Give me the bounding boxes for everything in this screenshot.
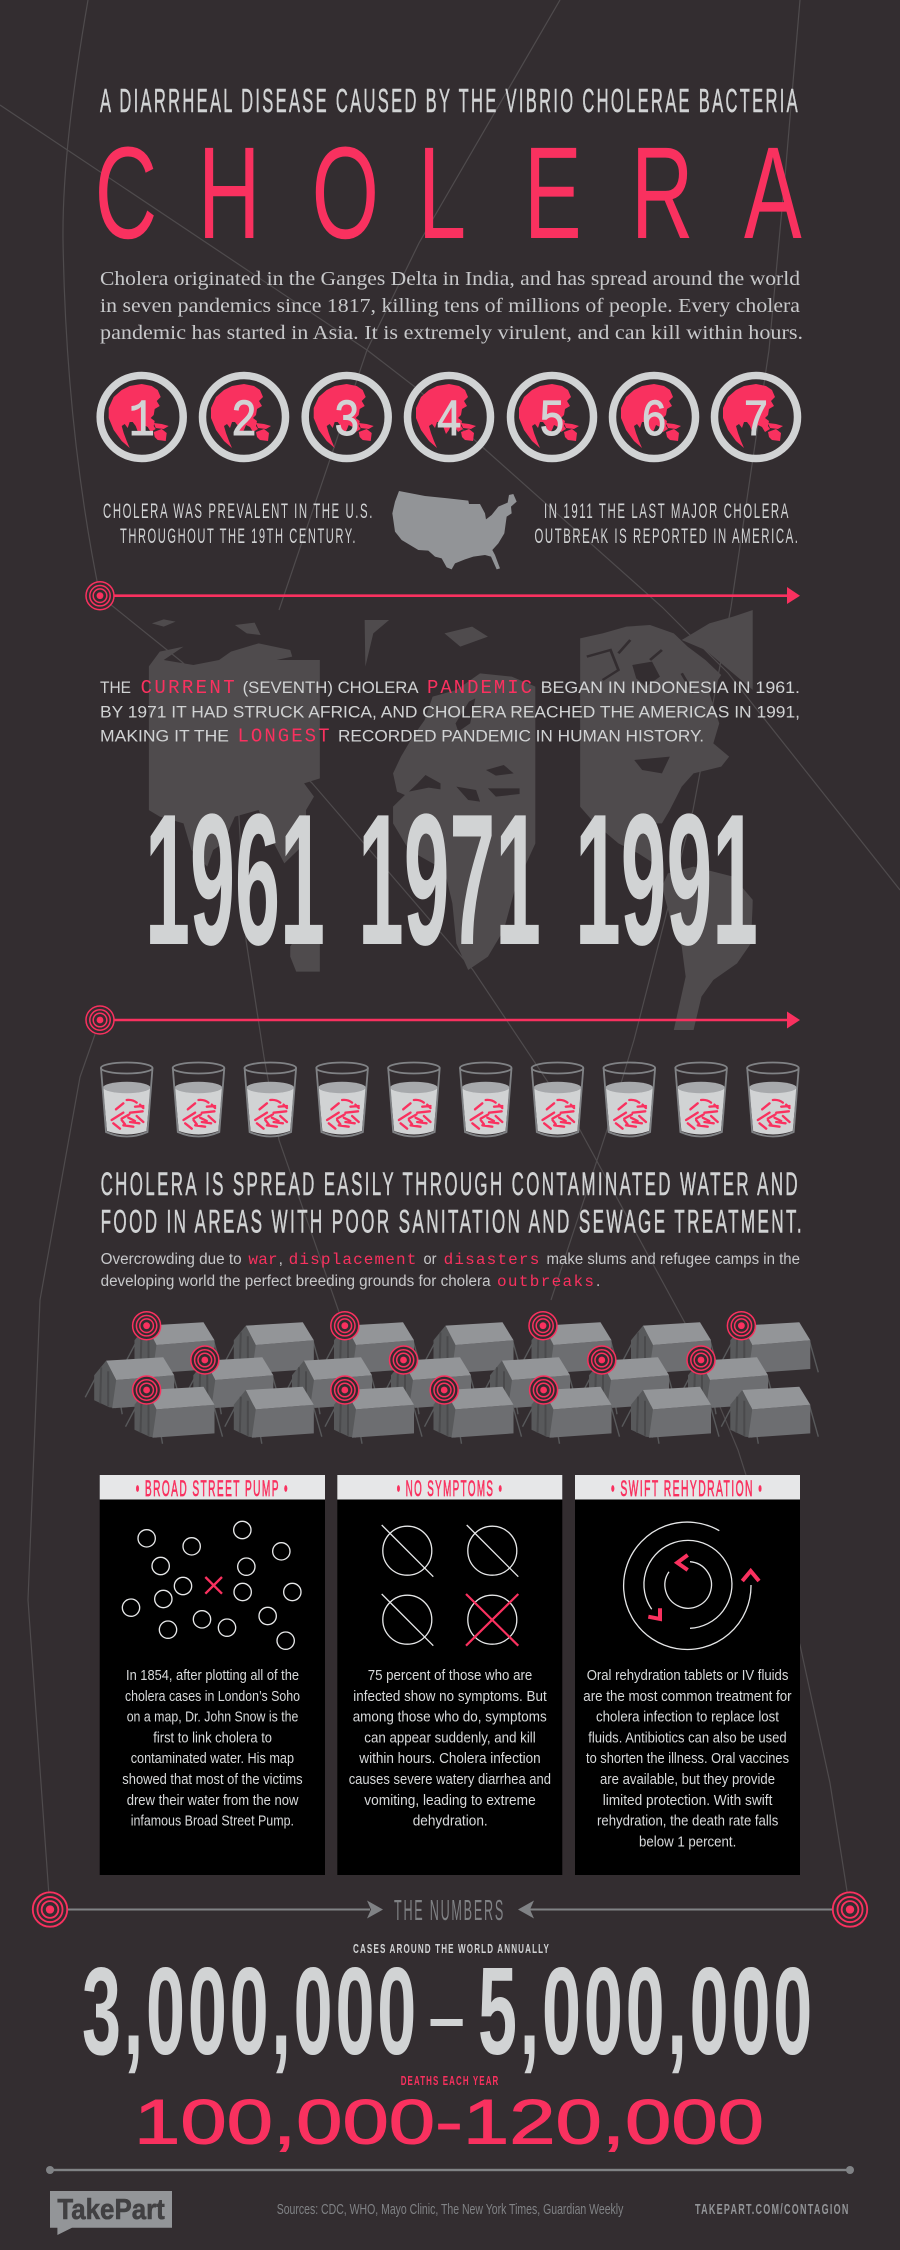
years: 1971 [358,775,541,984]
big number: cases: 3,000,000 [82,1943,419,2081]
panel text: Oral rehydration tablets or IV fluids [587,1668,788,1684]
panel text: infected show no symptoms. But [353,1689,547,1705]
panel text: drew their water from the now [127,1793,299,1809]
panel text: are the most common treatment for [583,1689,792,1705]
overcrowding text: . [596,1273,600,1290]
panel: Broad Street Pump: • BROAD STREET PUMP • [136,1476,289,1501]
panel text: first to link cholera to [153,1730,272,1746]
arrow right [518,1892,867,1927]
globe 2: 2 [231,392,257,451]
seven pandemic globes [100,376,797,458]
overcrowding text: disasters [444,1251,539,1269]
text: prevalent in U.S. [103,500,374,548]
overcrowding text: Overcrowding due to [101,1251,242,1268]
panel text: vomiting, leading to extreme [364,1793,536,1809]
panel text: to shorten the illness. Oral vaccines [586,1751,789,1767]
heading: spread [101,1166,804,1240]
panel text: rehydration, the death rate falls [597,1814,778,1830]
intro paragraph: Cholera originated in the Ganges Delta in India, and has spread around the world [100,268,800,290]
panel text: limited protection. With swift [603,1793,772,1809]
panel text: causes severe watery diarrhea and [349,1772,551,1788]
panel text [122,1668,303,1830]
the numbers divider: THE NUMBERS [394,1895,505,1927]
panel text: In 1854, after plotting all of the [126,1668,299,1684]
panel: No Symptoms: • NO SYMPTOMS • [397,1476,503,1501]
panel: Broad Street Pump [100,1475,325,1875]
pandemic paragraph [100,677,800,748]
globe 6 [612,376,696,458]
line 3: RECORDED PANDEMIC IN HUMAN HISTORY. [338,728,704,746]
overcrowding text: war [248,1251,278,1269]
panel text: on a map, Dr. John Snow is the [127,1710,298,1726]
tent row 2 [85,1357,776,1414]
overcrowding text: outbreaks [497,1273,594,1291]
sources: Sources: CDC, WHO, Mayo Clinic, The New York Times, Guardian Weekly [277,2202,624,2218]
icon: crossed circles [382,1525,518,1646]
globe 2 [202,376,286,458]
intro paragraph: in seven pandemics since 1817, killing tens of millions of people. Every cholera [100,295,800,317]
panel text [583,1668,792,1850]
panel text: can appear suddenly, and kill [364,1730,536,1746]
logo: TakePart: TakePart [57,2194,165,2226]
years [145,775,758,984]
panel text: fluids. Antibiotics can also be used [588,1730,787,1746]
icon: spiral arrows [624,1522,759,1649]
title: CHOLERA: CHOLERA [95,120,802,266]
contaminated water glasses [101,1062,799,1136]
text: prevalent in U.S.: THROUGHOUT THE 19TH CENTURY. [120,525,357,548]
intro paragraph [100,268,803,344]
the numbers divider [33,1892,867,1927]
panel text: contaminated water. His map [131,1751,294,1767]
panel text: cholera cases in London’s Soho [125,1689,300,1705]
line 2: BY 1971 IT HAD STRUCK AFRICA, AND CHOLERA REACHED THE AMERICAS IN 1991, [100,704,800,722]
overcrowding text [101,1251,800,1291]
globe 7 [714,376,798,458]
globe 4 [408,376,490,458]
arrow 2 [86,1006,800,1034]
line 1 [100,677,800,699]
panel text: infamous Broad Street Pump. [131,1814,294,1830]
globe 7: 7 [743,392,769,451]
label: cases: CASES AROUND THE WORLD ANNUALLY [353,1942,550,1956]
globe 5 [510,376,594,458]
line 3 [100,726,704,748]
globe 4: 4 [436,392,462,451]
line 1: BEGAN IN INDONESIA IN 1961. [541,679,800,697]
panel text: dehydration. [413,1814,488,1830]
globe 5: 5 [539,392,565,451]
line 1: (SEVENTH) CHOLERA [243,679,419,697]
overcrowding text: developing world the perfect breeding grounds for cholera [101,1273,491,1290]
line 3: MAKING IT THE [100,728,229,746]
line 3: LONGEST [238,726,330,748]
panel text: cholera infection to replace lost [596,1710,779,1726]
refugee camp tents [85,1312,818,1444]
globe 3 [305,376,388,458]
footer rule [46,2166,854,2174]
label: deaths: DEATHS EACH YEAR [401,2074,499,2088]
tent row 1 [126,1322,818,1379]
globe 1: 1 [129,392,155,451]
overcrowding text: or [424,1251,436,1268]
tent row 3 [126,1387,818,1444]
overcrowding text: displacement [289,1251,416,1269]
panel text: are available, but they provide [600,1772,775,1788]
line 1: PANDEMIC [427,677,532,699]
panel: Swift Rehydration [575,1475,800,1875]
icon: cholera case map [122,1521,301,1649]
line 1: THE [100,679,131,697]
logo: TakePart [50,2191,172,2235]
panel text: below 1 percent. [639,1834,736,1850]
line 1: CURRENT [141,677,235,699]
arrow 1 [86,582,800,610]
overcrowding text: make slums and refugee camps in the [546,1251,800,1268]
intro paragraph: pandemic has started in Asia. It is extremely virulent, and can kill within hours. [100,322,803,344]
globe 1 [100,376,183,458]
text: prevalent in U.S.: CHOLERA WAS PREVALENT IN THE U.S. [103,500,374,523]
big number: deaths: 100,000-120,000 [134,2087,764,2157]
panel: No Symptoms [337,1475,562,1875]
panel text: within hours. Cholera infection [358,1751,541,1767]
panel text: showed that most of the victims [122,1772,303,1788]
globe 3: 3 [334,392,360,451]
arrow left [33,1892,383,1927]
icon: U.S. map [392,491,517,569]
tent outbreak targets [133,1312,755,1404]
panel text [349,1668,551,1830]
world map [149,610,753,1030]
panel text: among those who do, symptoms [353,1710,547,1726]
panel text: 75 percent of those who are [368,1668,532,1684]
overcrowding text: , [279,1251,283,1268]
globe 6: 6 [641,392,667,451]
text: 1911 last outbreak [534,500,800,548]
years: 1961 [145,775,325,984]
